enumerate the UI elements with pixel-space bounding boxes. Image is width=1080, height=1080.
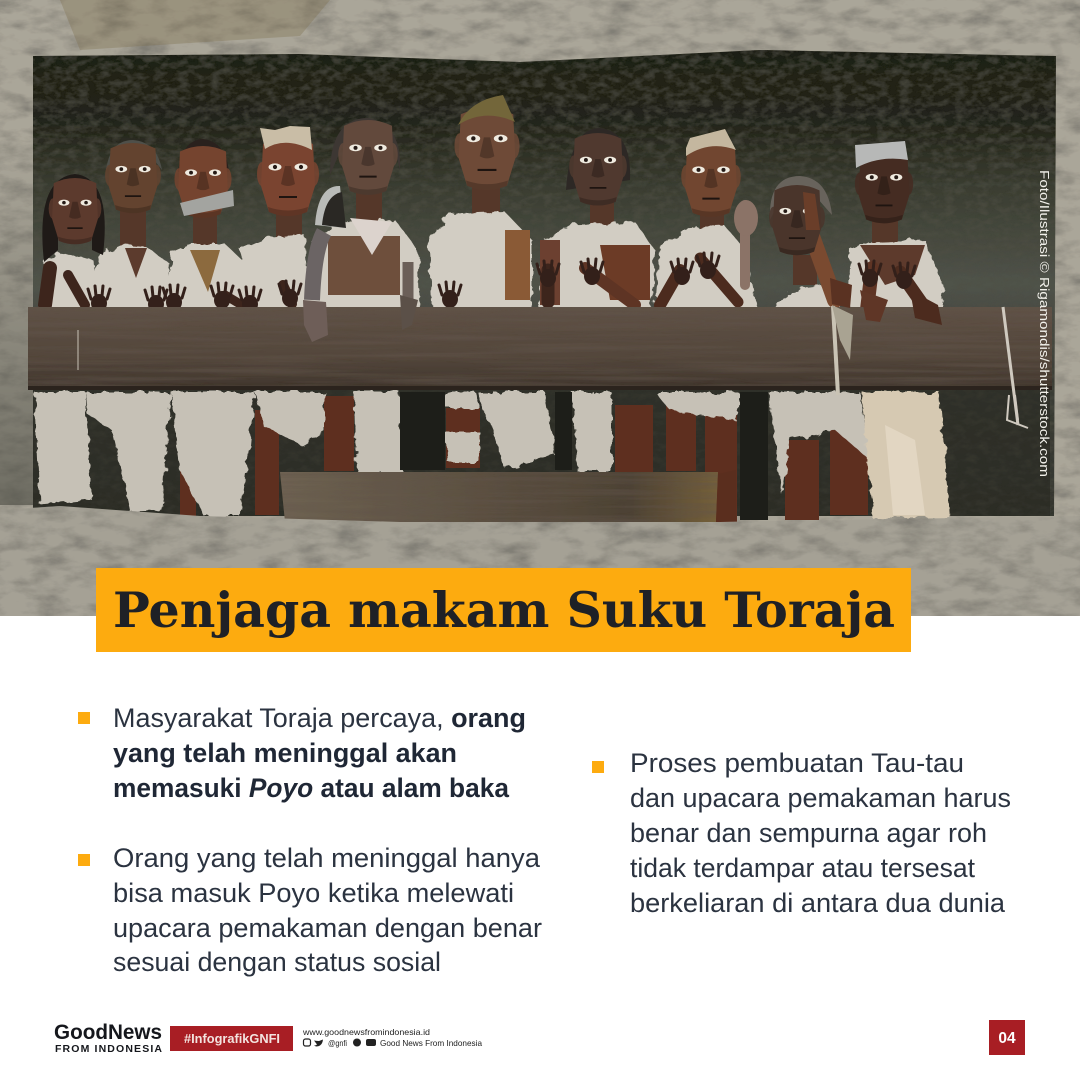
bullet text: right column point: berkeliaran di antara dua dunia — [630, 888, 1005, 918]
bullet text: left column second point: bisa masuk Poyo ketika melewati — [113, 878, 514, 908]
footer social links: www.goodnewsfromindonesia.id — [302, 1027, 430, 1037]
footer logo: GoodNews From Indonesia: GoodNews — [54, 1020, 162, 1044]
bullet text: right column point: benar dan sempurna agar roh — [630, 818, 987, 848]
niche wall — [33, 50, 1056, 516]
footer social links: @gnfi — [328, 1038, 347, 1048]
icon: youtube — [366, 1039, 376, 1046]
bullet text: right column point: Proses pembuatan Tau-tau — [630, 748, 964, 778]
hanging hands over the plank — [303, 278, 942, 342]
statues upper bodies — [40, 185, 945, 318]
bullet text: left column first point — [78, 703, 526, 803]
icon: instagram — [304, 1039, 310, 1046]
rock ledge — [0, 506, 1080, 616]
statues lower bodies — [33, 390, 1050, 522]
icon: facebook — [353, 1038, 361, 1046]
bullet text: left column first point: Masyarakat Toraja percaya, orang — [113, 703, 526, 733]
footer logo: GoodNews From Indonesia — [54, 1020, 162, 1055]
title banner — [96, 568, 911, 652]
bullet text: left column second point: upacara pemakaman dengan benar — [113, 913, 542, 943]
wooden plank railing — [28, 305, 1052, 428]
footer social links: Good News From Indonesia — [380, 1038, 482, 1048]
title banner: Penjaga makam Suku Toraja — [113, 581, 895, 639]
page number: 04 — [998, 1030, 1016, 1047]
lower wooden plank — [280, 470, 736, 522]
hashtag badge: #InfografikGNFI — [184, 1032, 280, 1046]
bullet text: left column second point — [78, 843, 542, 977]
hashtag badge — [170, 1026, 293, 1051]
footer logo: GoodNews From Indonesia: FROM INDONESIA — [55, 1043, 162, 1055]
bullet text: left column second point: Orang yang telah meninggal hanya — [113, 843, 540, 873]
statue heads — [42, 95, 913, 262]
bullet text: left column first point: yang telah meninggal akan — [113, 738, 457, 768]
photo credit: Foto/Ilustrasi © Rigamondis/shutterstock.com — [1037, 170, 1051, 477]
bullet text: left column second point: sesuai dengan status sosial — [113, 947, 441, 977]
bullet text: right column point: dan upacara pemakaman harus — [630, 783, 1011, 813]
page number — [989, 1020, 1025, 1055]
bullet text: right column point — [592, 748, 1011, 918]
photo: Toraja tau-tau statues in rock niche — [0, 0, 1080, 616]
arms and hands — [45, 258, 930, 318]
bullet text: right column point: tidak terdampar atau tersesat — [630, 853, 976, 883]
icon: twitter — [314, 1040, 323, 1046]
footer social links — [302, 1027, 482, 1048]
bullet text: left column first point: memasuki Poyo atau alam baka — [113, 773, 509, 803]
white text area background — [0, 616, 1080, 1080]
bullet icon — [78, 712, 90, 724]
bullet icon — [78, 854, 90, 866]
bullet icon — [592, 761, 604, 773]
